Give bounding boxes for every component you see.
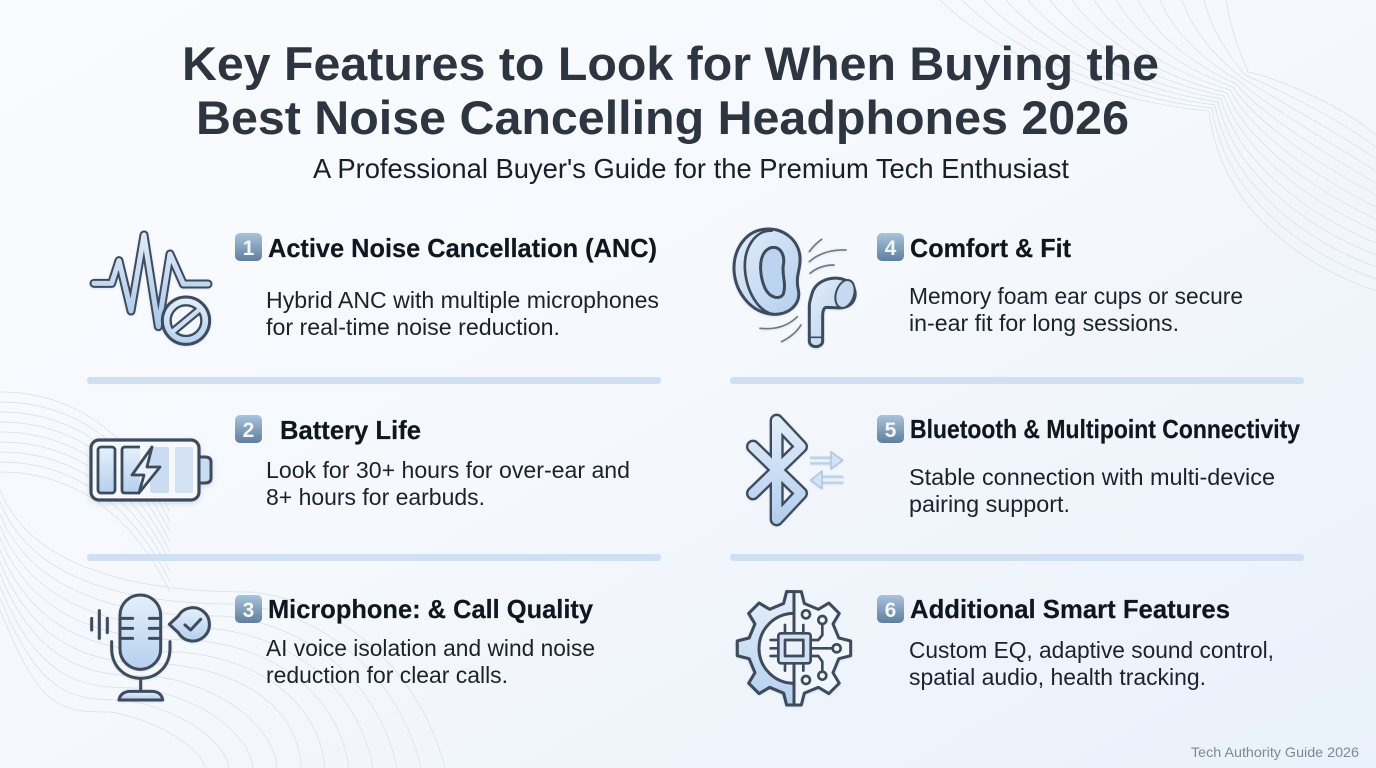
description 3 [266,635,595,688]
description 2 [266,457,630,510]
badge 3: 3 [243,599,254,622]
badge 4 [877,233,904,261]
description 2: Look for 30+ hours for over-ear and [266,457,630,483]
description 4 [909,283,1243,336]
description 3: reduction for clear calls. [266,662,508,688]
panel: active noise cancellation [94,233,659,344]
panel: additional smart features [737,592,1274,705]
description 4: Memory foam ear cups or secure [909,283,1243,309]
description 5: pairing support. [909,491,1070,517]
badge 2 [235,415,262,443]
heading 5: Bluetooth & Multipoint Connectivity [910,414,1300,444]
description 3: AI voice isolation and wind noise [266,635,595,661]
badge 1 [235,233,262,261]
panel: comfort and fit [734,229,1243,347]
title [182,37,1159,144]
description 2: 8+ hours for earbuds. [266,484,485,510]
heading 3: Microphone: & Call Quality [268,594,594,624]
heading 1: Active Noise Cancellation (ANC) [268,233,657,263]
description 4: in-ear fit for long sessions. [909,310,1179,336]
title: Best Noise Cancelling Headphones 2026 [196,91,1129,144]
badge 3 [235,595,262,623]
description 6: spatial audio, health tracking. [909,664,1206,690]
panel: battery life [91,415,630,510]
description 1: for real-time noise reduction. [266,314,560,340]
badge 4: 4 [885,237,897,260]
description 1 [266,287,659,340]
badge 6 [877,595,904,623]
icon: bluetooth with arrows [753,421,843,519]
heading 6: Additional Smart Features [910,594,1230,624]
icon: microphone with check bubble [92,595,209,700]
badge 2: 2 [243,419,254,442]
icon: ear cushion and earbud [734,229,858,347]
icon: waveform with no-noise symbol [94,235,210,344]
badge 5 [877,415,904,443]
badge 5: 5 [885,419,897,442]
heading 4: Comfort & Fit [910,233,1071,263]
footer credit: Tech Authority Guide 2026 [1191,744,1359,760]
panel: microphone and call quality [92,594,595,700]
icon: gear with chip [737,592,851,705]
heading 2: Battery Life [280,415,421,445]
description 6: Custom EQ, adaptive sound control, [909,637,1274,663]
description 1: Hybrid ANC with multiple microphones [266,287,659,313]
badge 1: 1 [243,237,255,260]
title: Key Features to Look for When Buying the [182,37,1159,90]
description 5: Stable connection with multi-device [909,464,1275,490]
panel: bluetooth and multipoint [753,414,1300,519]
subtitle: A Professional Buyer's Guide for the Premium Tech Enthusiast [313,153,1069,184]
description 5 [909,464,1275,517]
badge 6: 6 [885,599,896,622]
icon: battery with lightning bolt [91,440,211,500]
description 6 [909,637,1274,690]
